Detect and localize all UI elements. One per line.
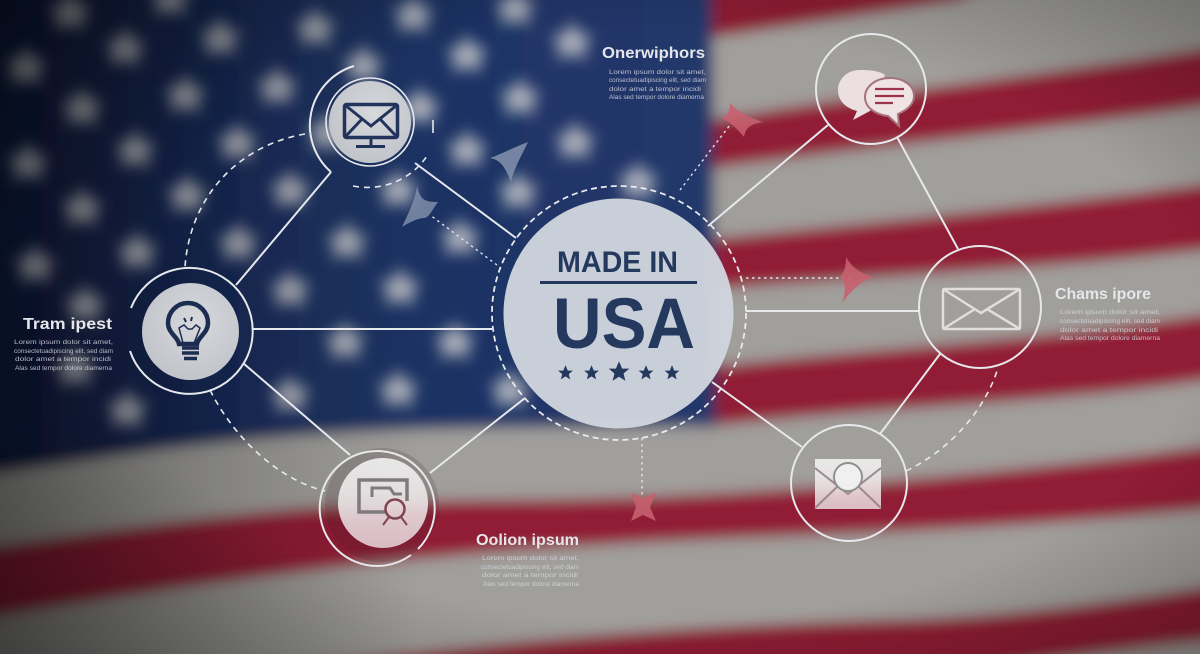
text block: tram ipest: Alas sed tempor dolore diamerna [15,365,112,372]
icon: monitor envelope [344,104,398,146]
node: document search [320,448,439,566]
text block: tram ipest: Lorem ipsum dolor sit amet, [14,339,113,346]
node: monitor mail [310,66,433,172]
icon: chat bubbles [838,70,914,126]
text block: onerwiphors: dolor amet a tempor incidi [609,86,701,93]
text block: oolion ipsum: Oolion ipsum [476,532,579,549]
network connector lines [185,125,998,498]
text block: oolion ipsum: consectetuadipiscing elit, sed diam [481,564,579,571]
text block: chams ipore [1055,286,1160,342]
badge stars [558,361,679,381]
arrow markers [402,103,873,521]
node: envelope [919,246,1041,368]
text block: tram ipest [14,316,113,372]
text block: onerwiphors: consectetuadipiscing elit, sed diam [609,77,706,84]
center badge: made in usa [492,186,746,440]
icon: open envelope with seal [815,459,881,509]
node: light bulb [130,268,253,394]
text block: tram ipest: Tram ipest [23,316,113,333]
text block: tram ipest: dolor amet a tempor incidi [15,356,111,363]
badge heading: usa: USA [553,285,695,364]
text block: chams ipore: Lorem ipsum dolor sit amet, [1060,309,1160,316]
text block: onerwiphors: Alas sed tempor dolore diamerna [609,94,704,101]
badge heading: made in: MADE IN [557,246,678,279]
text block: tram ipest: consectetuadipiscing elit, sed diam [14,348,113,355]
text block: oolion ipsum [476,532,579,588]
text block: chams ipore: dolor amet a tempor incidi [1060,327,1158,334]
text block: oolion ipsum: dolor amet a tempor incidi [482,572,578,579]
icon: envelope [943,289,1020,329]
text block: chams ipore: Alas sed tempor dolore diamerna [1060,335,1160,342]
text block: chams ipore: consectetuadipiscing elit, sed diam [1060,318,1160,325]
text block: onerwiphors: Onerwiphors [602,45,705,62]
icon: light bulb [168,303,208,358]
node: open envelope [791,425,907,541]
icon: folder with magnifier [359,480,407,525]
node: chat bubbles [816,34,926,144]
text block: onerwiphors [602,45,706,101]
text block: chams ipore: Chams ipore [1055,286,1151,303]
text block: oolion ipsum: Lorem ipsum dolor sit amet, [482,555,579,562]
text block: oolion ipsum: Alas sed tempor dolore diamerna [483,581,579,588]
text block: onerwiphors: Lorem ipsum dolor sit amet, [609,69,706,76]
